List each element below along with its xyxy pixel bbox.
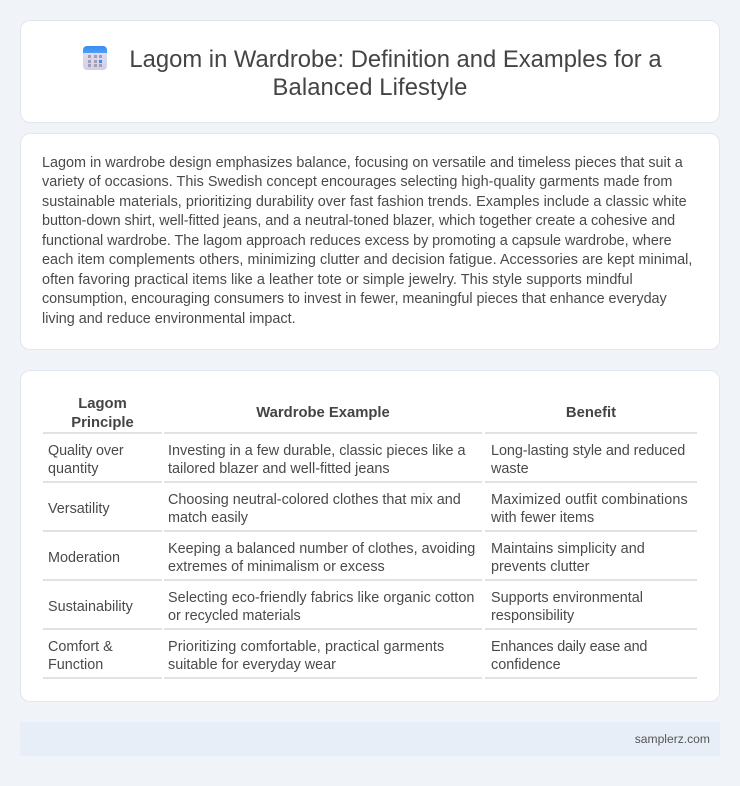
column header: Benefit: Benefit bbox=[566, 405, 616, 421]
row: Quality over quantity bbox=[48, 443, 685, 477]
row: Comfort & Function: Enhances daily ease and bbox=[491, 639, 647, 655]
row: Moderation bbox=[48, 541, 645, 575]
title bbox=[129, 46, 662, 101]
description text: functional wardrobe. The lagom approach reduces excess by promoting a capsule wardrobe, where bbox=[42, 233, 672, 249]
table bbox=[43, 396, 697, 679]
description text: living and reduce environmental impact. bbox=[42, 311, 296, 327]
column header: Lagom Principle: Principle bbox=[71, 415, 134, 431]
row: Quality over quantity: Investing in a few durable, classic pieces like a bbox=[168, 443, 466, 459]
row: Sustainability bbox=[48, 590, 643, 624]
description text: variety of occasions. This Swedish concept encourages selecting high-quality garments made from bbox=[42, 174, 672, 190]
description text: often favoring practical items like a leather tote or simple jewelry. This style supports mindful bbox=[42, 272, 633, 288]
header panel bbox=[20, 20, 720, 123]
column header: Lagom Principle bbox=[71, 396, 134, 431]
description text: sustainable materials, prioritizing durability over fast fashion trends. Examples include a classic white bbox=[42, 194, 687, 210]
row: Versatility: Maximized outfit combinations bbox=[491, 492, 688, 508]
row: Quality over quantity: Quality over bbox=[48, 443, 124, 459]
row: Sustainability: Selecting eco-friendly fabrics like organic cotton bbox=[168, 590, 474, 606]
row: Comfort & Function: Prioritizing comfortable, practical garments bbox=[168, 639, 444, 655]
title: Lagom in Wardrobe: Definition and Examples for a bbox=[129, 46, 662, 73]
row: Versatility bbox=[48, 492, 688, 526]
row: Versatility: with fewer items bbox=[491, 510, 594, 526]
row: Comfort & Function: suitable for everyday wear bbox=[168, 657, 336, 673]
row: Moderation: Keeping a balanced number of clothes, avoiding bbox=[168, 541, 475, 557]
row: Comfort & Function: confidence bbox=[491, 657, 561, 673]
column header: Wardrobe Example: Wardrobe Example bbox=[256, 405, 390, 421]
row: Comfort & Function: Comfort & bbox=[48, 639, 113, 655]
row: Versatility: match easily bbox=[168, 510, 248, 526]
description text: consumption, encouraging consumers to invest in fewer, meaningful pieces that enhance everyday bbox=[42, 291, 667, 307]
footer text: samplerz.com bbox=[635, 732, 710, 746]
row: Moderation: extremes of minimalism or excess bbox=[168, 559, 385, 575]
row: Quality over quantity: tailored blazer and well-fitted jeans bbox=[168, 461, 390, 477]
description text: button-down shirt, well-fitted jeans, and a neutral-toned blazer, which together create a cohesive and bbox=[42, 213, 675, 229]
icon: calendar bbox=[83, 46, 107, 70]
row: Moderation: Moderation bbox=[48, 550, 120, 566]
row: Moderation: prevents clutter bbox=[491, 559, 589, 575]
row: Versatility: Versatility bbox=[48, 501, 110, 517]
footer bar bbox=[20, 722, 720, 756]
row: Moderation: Maintains simplicity and bbox=[491, 541, 645, 557]
table panel bbox=[20, 370, 720, 702]
row: Quality over quantity: waste bbox=[491, 461, 529, 477]
row: Sustainability: or recycled materials bbox=[168, 608, 301, 624]
description panel bbox=[20, 133, 720, 350]
description text: each item complements others, minimizing clutter and decision fatigue. Accessories are kept minimal, bbox=[42, 252, 692, 268]
row: Sustainability: responsibility bbox=[491, 608, 574, 624]
row: Sustainability: Supports environmental bbox=[491, 590, 643, 606]
description text: Lagom in wardrobe design emphasizes balance, focusing on versatile and timeless pieces that suit a bbox=[42, 155, 683, 171]
row: Sustainability: Sustainability bbox=[48, 599, 133, 615]
row: Versatility: Choosing neutral-colored clothes that mix and bbox=[168, 492, 461, 508]
description text bbox=[42, 155, 692, 327]
row: Quality over quantity: Long-lasting style and reduced bbox=[491, 443, 685, 459]
row: Comfort & Function bbox=[48, 639, 647, 673]
row: Quality over quantity: quantity bbox=[48, 461, 98, 477]
column header: Lagom Principle: Lagom bbox=[78, 396, 127, 412]
title: Balanced Lifestyle bbox=[273, 74, 467, 101]
row: Comfort & Function: Function bbox=[48, 657, 103, 673]
